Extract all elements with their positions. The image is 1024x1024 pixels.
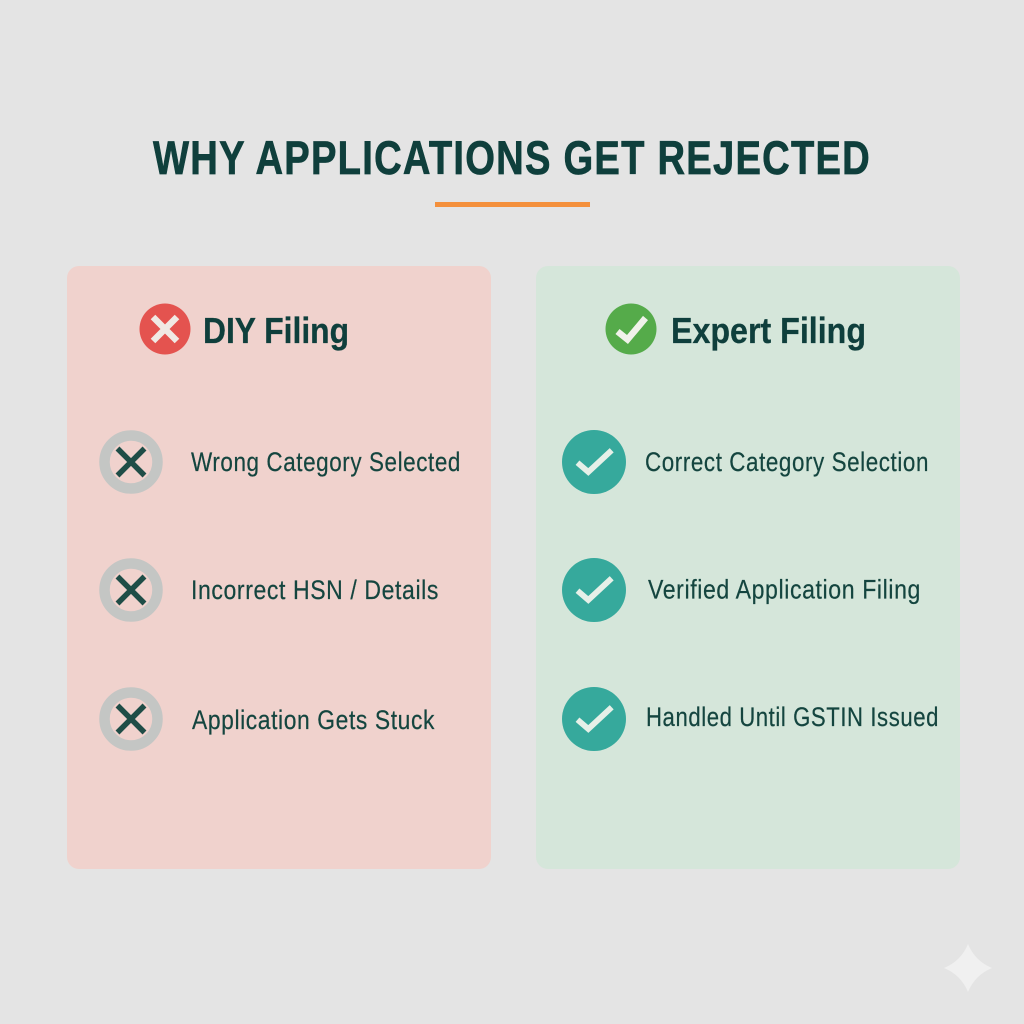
panel: Expert Filing [536,266,960,869]
item: Handled Until GSTIN Issued [562,687,939,751]
panel: DIY Filing [67,266,491,869]
item: Correct Category Selection [562,430,929,494]
heading: DIY Filing: DIY Filing [203,310,349,351]
item: Wrong Category Selected: Wrong Category Selected [191,447,461,477]
item: Application Gets Stuck [104,692,435,746]
heading: Expert Filing: Expert Filing [671,310,866,351]
item: Wrong Category Selected [104,436,461,488]
item: Verified Application Filing [562,558,921,622]
title underline [435,202,590,207]
item: Correct Category Selection: Correct Category Selection [645,447,929,477]
icon: green check [606,304,656,354]
icon: sparkle watermark [944,944,992,992]
item: Handled Until GSTIN Issued: Handled Until GSTIN Issued [646,702,939,732]
item: Incorrect HSN / Details [104,564,439,616]
item: Verified Application Filing: Verified Application Filing [648,574,921,604]
item: Incorrect HSN / Details: Incorrect HSN / Details [191,575,439,605]
icon: red cross [140,304,190,354]
item: Application Gets Stuck: Application Gets Stuck [192,705,435,735]
title: WHY APPLICATIONS GET REJECTED [153,131,871,184]
